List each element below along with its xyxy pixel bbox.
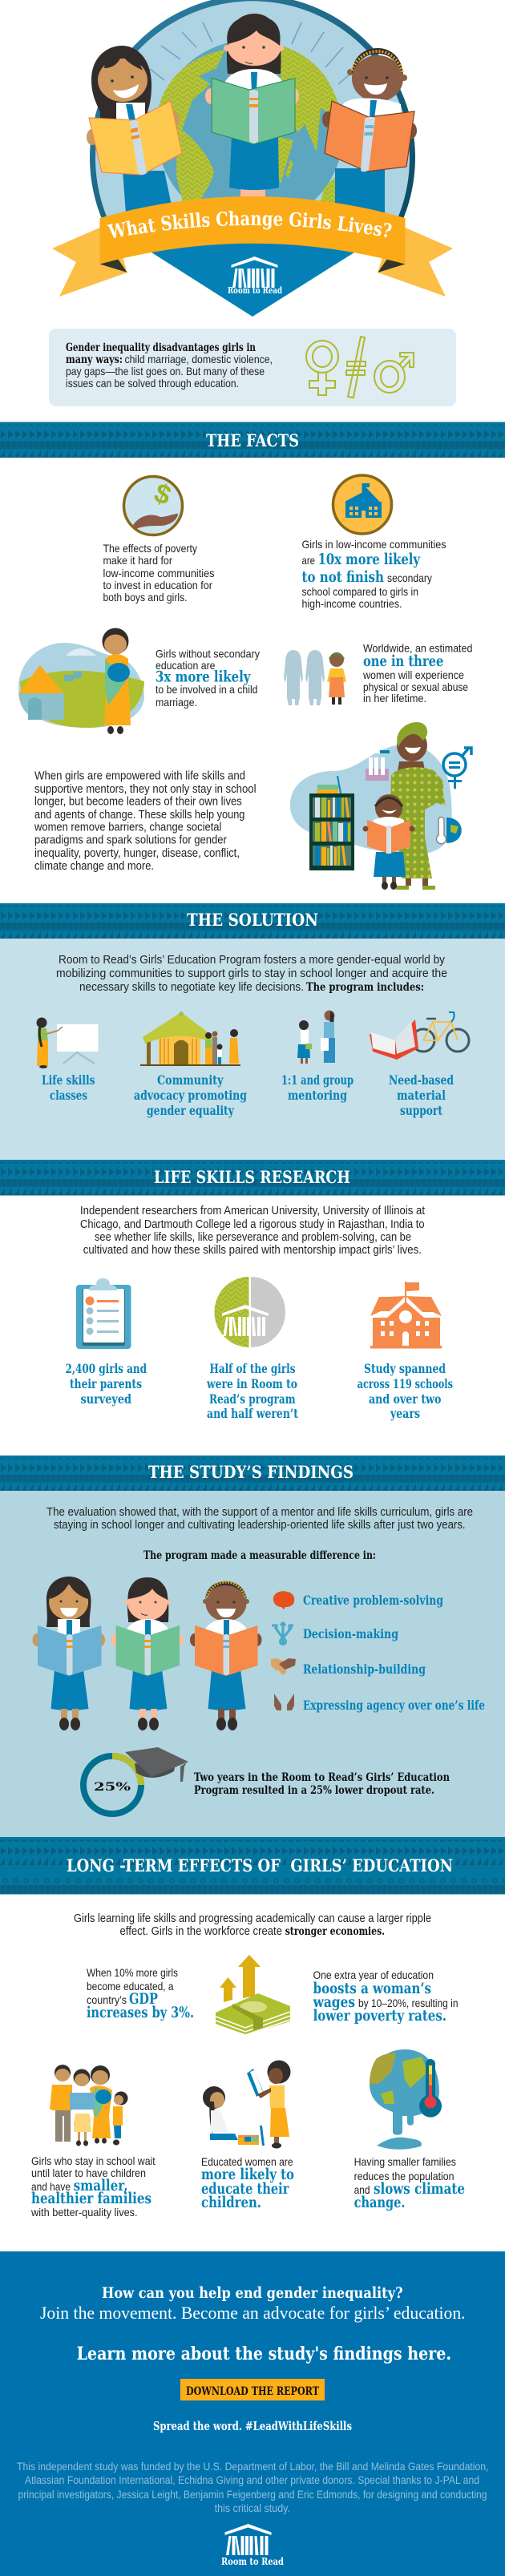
funding text: this critical study. (215, 2502, 290, 2514)
panel: the solution (0, 939, 505, 1160)
icon: mentor and child (297, 1010, 335, 1064)
text: educate children: educate their (201, 2180, 289, 2198)
bookshelf (309, 776, 354, 870)
text: smaller families: Girls who stay in school wait (31, 2154, 156, 2167)
solution text (56, 953, 447, 994)
research text: Independent researchers from American University, University of Illinois at (80, 1204, 426, 1217)
text: school compared to girls in (301, 585, 418, 598)
label (358, 1361, 453, 1421)
icon: brain (273, 1591, 294, 1609)
intro text: issues can be solved through education. (66, 377, 239, 390)
text: physical or sexual abuse (363, 680, 468, 693)
text: educate children: children. (201, 2194, 261, 2211)
text: educate children (201, 2155, 294, 2211)
illustration: woman, girl and bookshelf (290, 722, 471, 890)
icon: teacher at whiteboard (37, 1018, 98, 1068)
hero badge (52, 0, 453, 317)
text: when girls are empowered (34, 769, 257, 873)
label: Community (157, 1072, 224, 1088)
text: GDP: increases by 3%. (87, 2004, 194, 2021)
label: their parents (70, 1376, 142, 1391)
stat: 25 percent (83, 1747, 450, 1814)
banner: the solution (0, 903, 505, 939)
icon: gender equality (443, 748, 471, 789)
girl with orange book (362, 794, 415, 890)
solution text: The program includes: (306, 981, 424, 994)
ring chart: 25% (94, 1781, 131, 1794)
icon: dollar and hand: $ (150, 478, 175, 511)
long-term intro text (74, 1912, 431, 1938)
text: climate: change. (354, 2194, 406, 2211)
text: make it hard for (103, 554, 172, 567)
text: GDP: GDP (129, 1990, 158, 2008)
text: are (301, 554, 315, 567)
text (103, 542, 215, 604)
icon: decision arrows (272, 1622, 293, 1645)
item: material support (370, 1012, 469, 1118)
text: marriage. (156, 696, 197, 709)
intro text: many ways: (66, 353, 123, 366)
right girl with orange book (322, 48, 417, 220)
label: were in Room to (206, 1376, 297, 1391)
text: when girls are empowered: paradigms and spark solutions for gender (34, 834, 227, 847)
icon: dollar and hand (123, 476, 183, 535)
pie chart (215, 1277, 285, 1347)
text: when girls are empowered: climate change and more. (34, 859, 154, 873)
research text: cultivated and how these skills paired with mentorship impact girls’ lives. (83, 1243, 422, 1257)
intro text: Gender inequality disadvantages girls in (66, 341, 256, 354)
icon: open book (370, 1019, 418, 1060)
stat: schools (358, 1282, 453, 1421)
logo: Room to Read (221, 2524, 284, 2567)
text: to invest in education for (103, 579, 212, 592)
icon: clipboard (76, 1278, 131, 1349)
label (281, 1072, 354, 1103)
label (42, 1072, 95, 1103)
text: when girls are empowered: inequality, poverty, hunger, disease, conflict, (34, 846, 240, 860)
text: educate children: Educated women are (201, 2155, 293, 2168)
label: gender equality (147, 1103, 235, 1118)
text: climate: slows climate (374, 2180, 465, 2198)
text: smaller families: until later to have children (31, 2166, 146, 2179)
intro text: pay gaps—the list goes on. But many of these (66, 365, 265, 378)
icon: school (333, 475, 391, 534)
solution text: Room to Read’s Girls’ Education Program fosters a more gender-equal world by (59, 953, 445, 967)
text: one in three (363, 652, 443, 670)
title: What Skills Change Girls Lives? (107, 211, 391, 238)
shield with ring (90, 0, 415, 317)
icon: handshake (271, 1658, 296, 1675)
icon: thermometer and globe (436, 818, 462, 844)
label: Life skills (42, 1072, 95, 1088)
ribbon with title (52, 196, 453, 297)
left girl with yellow book (87, 46, 182, 224)
text: climate: Having smaller families (354, 2155, 456, 2168)
illustration: woman with baby in village (18, 628, 144, 734)
item: mentoring (281, 1010, 354, 1103)
text: GDP: become educated, a (87, 1980, 174, 1993)
label: and over two (369, 1391, 442, 1407)
text: Program resulted in a 25% lower dropout rate. (194, 1784, 434, 1797)
text: educate children: more likely to (201, 2166, 294, 2183)
item: life skills classes (37, 1018, 98, 1103)
panel: the study's findings (0, 1491, 505, 1837)
findings text (46, 1505, 473, 1532)
text: when girls are empowered: longer, but become leaders of their own lives (34, 795, 242, 808)
woman in green dress (390, 722, 446, 890)
text: climate (354, 2155, 465, 2211)
text: smaller families (30, 2154, 156, 2219)
text: climate: and (354, 2183, 370, 2196)
logo: Room to Read: Room to Read (228, 285, 282, 296)
text (362, 641, 472, 705)
text: low-income communities (103, 567, 215, 579)
label: 2,400 girls and (66, 1361, 147, 1376)
text: in her lifetime. (363, 692, 426, 705)
globe (157, 40, 343, 226)
call to action heading: How can you help end gender inequality? (102, 2284, 403, 2302)
long-term intro text: stronger economies. (285, 1925, 385, 1938)
girl with blue book (32, 1577, 105, 1730)
icon: test tubes (366, 750, 390, 781)
text: wages: by 10–20%, resulting in (358, 1997, 459, 2009)
logo: Room to Read (228, 256, 282, 296)
illustration: woman reading to girl (203, 2060, 290, 2148)
banner: the facts: THE FACTS (206, 430, 299, 450)
long-term intro text: Girls learning life skills and progressing academically can cause a larger ripple (74, 1912, 431, 1925)
text: high-income countries. (301, 597, 402, 610)
intro text: child marriage, domestic violence, (125, 353, 273, 365)
icon: school (370, 1282, 442, 1348)
footer panel (0, 2251, 505, 2576)
call to action heading: Join the movement. Become an advocate for girls’ education. (40, 2303, 466, 2323)
logo: Room to Read: Room to Read (221, 2555, 284, 2567)
label: across 119 schools (358, 1376, 453, 1391)
text: wages (313, 1968, 459, 2025)
icon: gender inequality symbols (306, 337, 414, 398)
solution text: mobilizing communities to support girls to stay in school longer and acquire the (56, 967, 447, 980)
text: secondary (387, 571, 432, 584)
icon: graduation cap (125, 1747, 188, 1782)
girl with orange book (190, 1581, 261, 1730)
intro text (66, 341, 273, 390)
research text: see whether life skills, like perseverance and problem-solving, can be (95, 1230, 411, 1244)
label (134, 1072, 247, 1118)
skills list (271, 1591, 485, 1713)
fact: secondary school (301, 475, 446, 610)
girl with green book (111, 1577, 183, 1730)
text (156, 648, 260, 709)
label: Need-based (389, 1072, 454, 1088)
text: wages: One extra year of education (313, 1968, 434, 1981)
label: surveyed (80, 1391, 131, 1407)
text: smaller families: and have (31, 2180, 71, 2193)
text: Girls without secondary (156, 648, 260, 660)
button: download the report: DOWNLOAD THE REPORT (186, 2385, 319, 2398)
label: Creative problem-solving (303, 1593, 443, 1608)
text: GDP (87, 1966, 194, 2021)
fact: one in three (284, 641, 472, 705)
text: wages: wages (313, 1993, 355, 2011)
banner: long-term effects (0, 1837, 505, 1895)
banner: life skills research (0, 1160, 505, 1196)
subheading: The program made a measurable difference in: (143, 1549, 376, 1562)
text: 3x more likely (156, 668, 251, 686)
stat: half of the girls (206, 1277, 298, 1421)
label: Half of the girls (210, 1361, 295, 1376)
label: mentoring (288, 1088, 347, 1103)
solution text: necessary skills to negotiate key life decisions. (79, 980, 304, 994)
text: Girls in low-income communities (301, 538, 446, 551)
text: smaller families: smaller, (74, 2177, 128, 2194)
banner: the solution: THE SOLUTION (187, 910, 318, 930)
illustration: family (50, 2065, 128, 2146)
label: advocacy promoting (134, 1088, 247, 1103)
text: when girls are empowered: supportive mentors, they not only stay in school (34, 782, 257, 796)
call to action heading (40, 2284, 466, 2323)
hashtag line: Spread the word. #LeadWithLifeSkills (153, 2420, 352, 2433)
illustration: melting globe with thermometer (370, 2049, 442, 2150)
learn more heading: Learn more about the study's findings here. (77, 2344, 451, 2364)
icon: hands (274, 1694, 294, 1710)
label: support (400, 1103, 442, 1118)
label: material (397, 1088, 446, 1103)
label: years (390, 1406, 420, 1421)
icon: bicycle (412, 1012, 469, 1052)
label: and half weren’t (207, 1406, 298, 1421)
text: GDP: When 10% more girls (87, 1966, 178, 1979)
fact: child marriage (18, 628, 260, 734)
illustration: three women (284, 650, 346, 705)
text: education are (156, 659, 216, 672)
text: women will experience (362, 668, 464, 681)
label (206, 1361, 298, 1421)
text (194, 1771, 450, 1797)
stat: girls surveyed (66, 1278, 147, 1407)
text: GDP: country’s (87, 1993, 127, 2006)
center girl with green book (205, 14, 299, 197)
ring chart (83, 1756, 141, 1814)
text: both boys and girls. (103, 591, 188, 604)
text: The effects of poverty (103, 542, 197, 555)
text (301, 538, 446, 610)
label: Study spanned (364, 1361, 446, 1376)
text: 10x more likely (318, 551, 421, 568)
text: smaller families: healthier families (31, 2190, 152, 2207)
text: when girls are empowered: and agents of change. These skills help young (34, 808, 244, 822)
long-term intro text: effect. Girls in the workforce create (120, 1924, 282, 1938)
text: Two years in the Room to Read’s Girls’ Education (194, 1771, 450, 1784)
label: 1:1 and group (281, 1072, 354, 1088)
label (389, 1072, 454, 1118)
item: community advocacy (134, 1011, 247, 1118)
banner: the study's findings: THE STUDY’S FINDINGS (148, 1462, 354, 1482)
funding text (17, 2461, 489, 2514)
banner: the facts (0, 422, 505, 458)
button: download the report (180, 2379, 325, 2400)
label: Relationship-building (303, 1661, 426, 1677)
text: wages: boosts a woman’s (313, 1980, 431, 1997)
text: smaller families: with better-quality lives. (30, 2206, 138, 2219)
icon: hut with people (140, 1011, 240, 1066)
text: when girls are empowered: When girls are empowered with life skills and (34, 769, 245, 782)
label (66, 1361, 147, 1407)
text: climate: reduces the population (354, 2170, 454, 2182)
intro panel (49, 329, 456, 406)
text: when girls are empowered: women remove barriers, change societal (34, 821, 221, 834)
label: Decision-making (303, 1626, 398, 1641)
banner: life skills research: LIFE SKILLS RESEARCH (154, 1167, 350, 1187)
text: Worldwide, an estimated (363, 641, 472, 654)
text: to be involved in a child (156, 683, 258, 696)
label: Read’s program (209, 1391, 296, 1407)
research text (80, 1204, 426, 1257)
fact: poverty (103, 476, 215, 604)
icon: money with arrows (216, 1955, 290, 2035)
label: classes (50, 1088, 87, 1103)
banner: the study's findings (0, 1456, 505, 1491)
text: to not finish (301, 568, 384, 586)
text: wages: lower poverty rates. (313, 2007, 446, 2025)
research text: Chicago, and Dartmouth College led a rigorous study in Rajasthan, India to (80, 1217, 425, 1231)
